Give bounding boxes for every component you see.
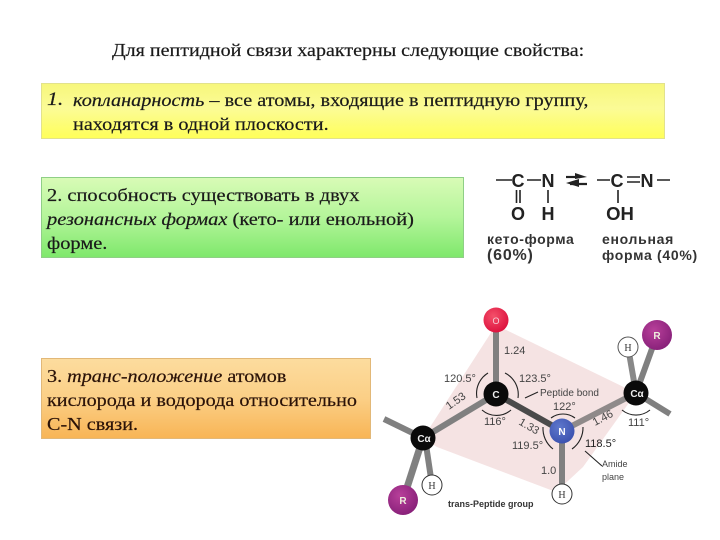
measurements: 122°: [553, 401, 576, 413]
atom: R left: [388, 485, 418, 515]
keto label: (60%): [487, 247, 534, 264]
keto structure: N: [542, 171, 554, 191]
atom: nitrogen: [550, 418, 574, 444]
resonance text: форме.: [47, 233, 107, 253]
measurements: [444, 345, 649, 482]
enol structure: [597, 171, 670, 224]
enol structure: C: [610, 171, 624, 191]
caption: trans-Peptide group: [448, 499, 534, 509]
measurements: 116°: [484, 416, 506, 428]
measurements: plane: [602, 472, 624, 482]
measurements: 1.33: [516, 416, 541, 437]
measurements: 111°: [628, 417, 649, 429]
measurements: 123.5°: [519, 373, 551, 385]
coplanarity text: находятся в одной плоскости.: [73, 114, 329, 134]
resonance text: 2. способность существовать в двух: [47, 185, 359, 205]
enol structure: N: [640, 171, 654, 191]
atom: right alpha carbon: [624, 380, 648, 406]
coplanarity text: копланарность – все атомы, входящие в пептидную группу,: [73, 90, 588, 110]
atom: left alpha carbon: [410, 426, 436, 450]
atom: hydrogen right: [618, 337, 638, 357]
keto-enol diagram: [487, 171, 698, 264]
resonance text: [46, 185, 414, 254]
keto structure: O: [511, 204, 525, 224]
atom: R right: [642, 320, 672, 350]
resonance text: резонансных формах (кето- или енольной): [47, 209, 414, 229]
atom: hydrogen left: H: [428, 481, 436, 492]
atom: carbon: C: [492, 390, 500, 401]
trans text: C-N связи.: [47, 414, 138, 434]
trans text: 3. транс-положение атомов: [47, 366, 286, 386]
atom: R left: R: [399, 496, 407, 507]
panel: coplanarity: [41, 83, 665, 139]
panel: resonance forms: [41, 177, 464, 258]
measurements: Peptide bond: [540, 388, 599, 399]
amide plane: [423, 325, 636, 492]
measurements: 120.5°: [444, 373, 476, 385]
measurements: 119.5°: [512, 440, 543, 452]
keto structure: [496, 171, 554, 224]
coplanarity text: [73, 90, 588, 134]
atom: oxygen: [484, 308, 508, 332]
bonds: [384, 320, 670, 500]
atom: left alpha carbon: Cα: [417, 434, 432, 445]
number 1: 1.: [47, 89, 63, 110]
measurements: 1.46: [591, 408, 615, 429]
trans text: кислорода и водорода относительно: [47, 390, 357, 410]
atom: oxygen: O: [492, 316, 500, 326]
atom: hydrogen left: [422, 475, 442, 495]
equilibrium arrows: [566, 173, 587, 187]
enol label: енольная: [602, 231, 674, 247]
keto structure: C: [512, 171, 524, 191]
panel: trans position: [41, 358, 371, 439]
keto structure: H: [542, 204, 554, 224]
measurements: Amide: [602, 459, 628, 469]
trans text: [47, 366, 357, 434]
atom: hydrogen right: H: [624, 343, 632, 354]
enol label: форма (40%): [602, 247, 698, 263]
measurements: 1.53: [444, 390, 468, 412]
measurements: 118.5°: [585, 438, 616, 450]
atom: nitrogen: N: [558, 427, 566, 438]
atom: right alpha carbon: Cα: [630, 389, 645, 400]
atom: hydrogen bottom: H: [558, 490, 566, 501]
atom: hydrogen bottom: [552, 484, 572, 504]
keto label: кето-форма: [487, 231, 574, 247]
enol structure: OH: [606, 203, 634, 224]
angle arcs: [477, 373, 650, 466]
measurements: 1.0: [541, 465, 556, 477]
title: Для пептидной связи характерны следующие свойства:: [112, 40, 584, 60]
measurements: 1.24: [504, 345, 525, 357]
atom: carbon: [484, 382, 508, 406]
atom: R right: R: [653, 331, 661, 342]
